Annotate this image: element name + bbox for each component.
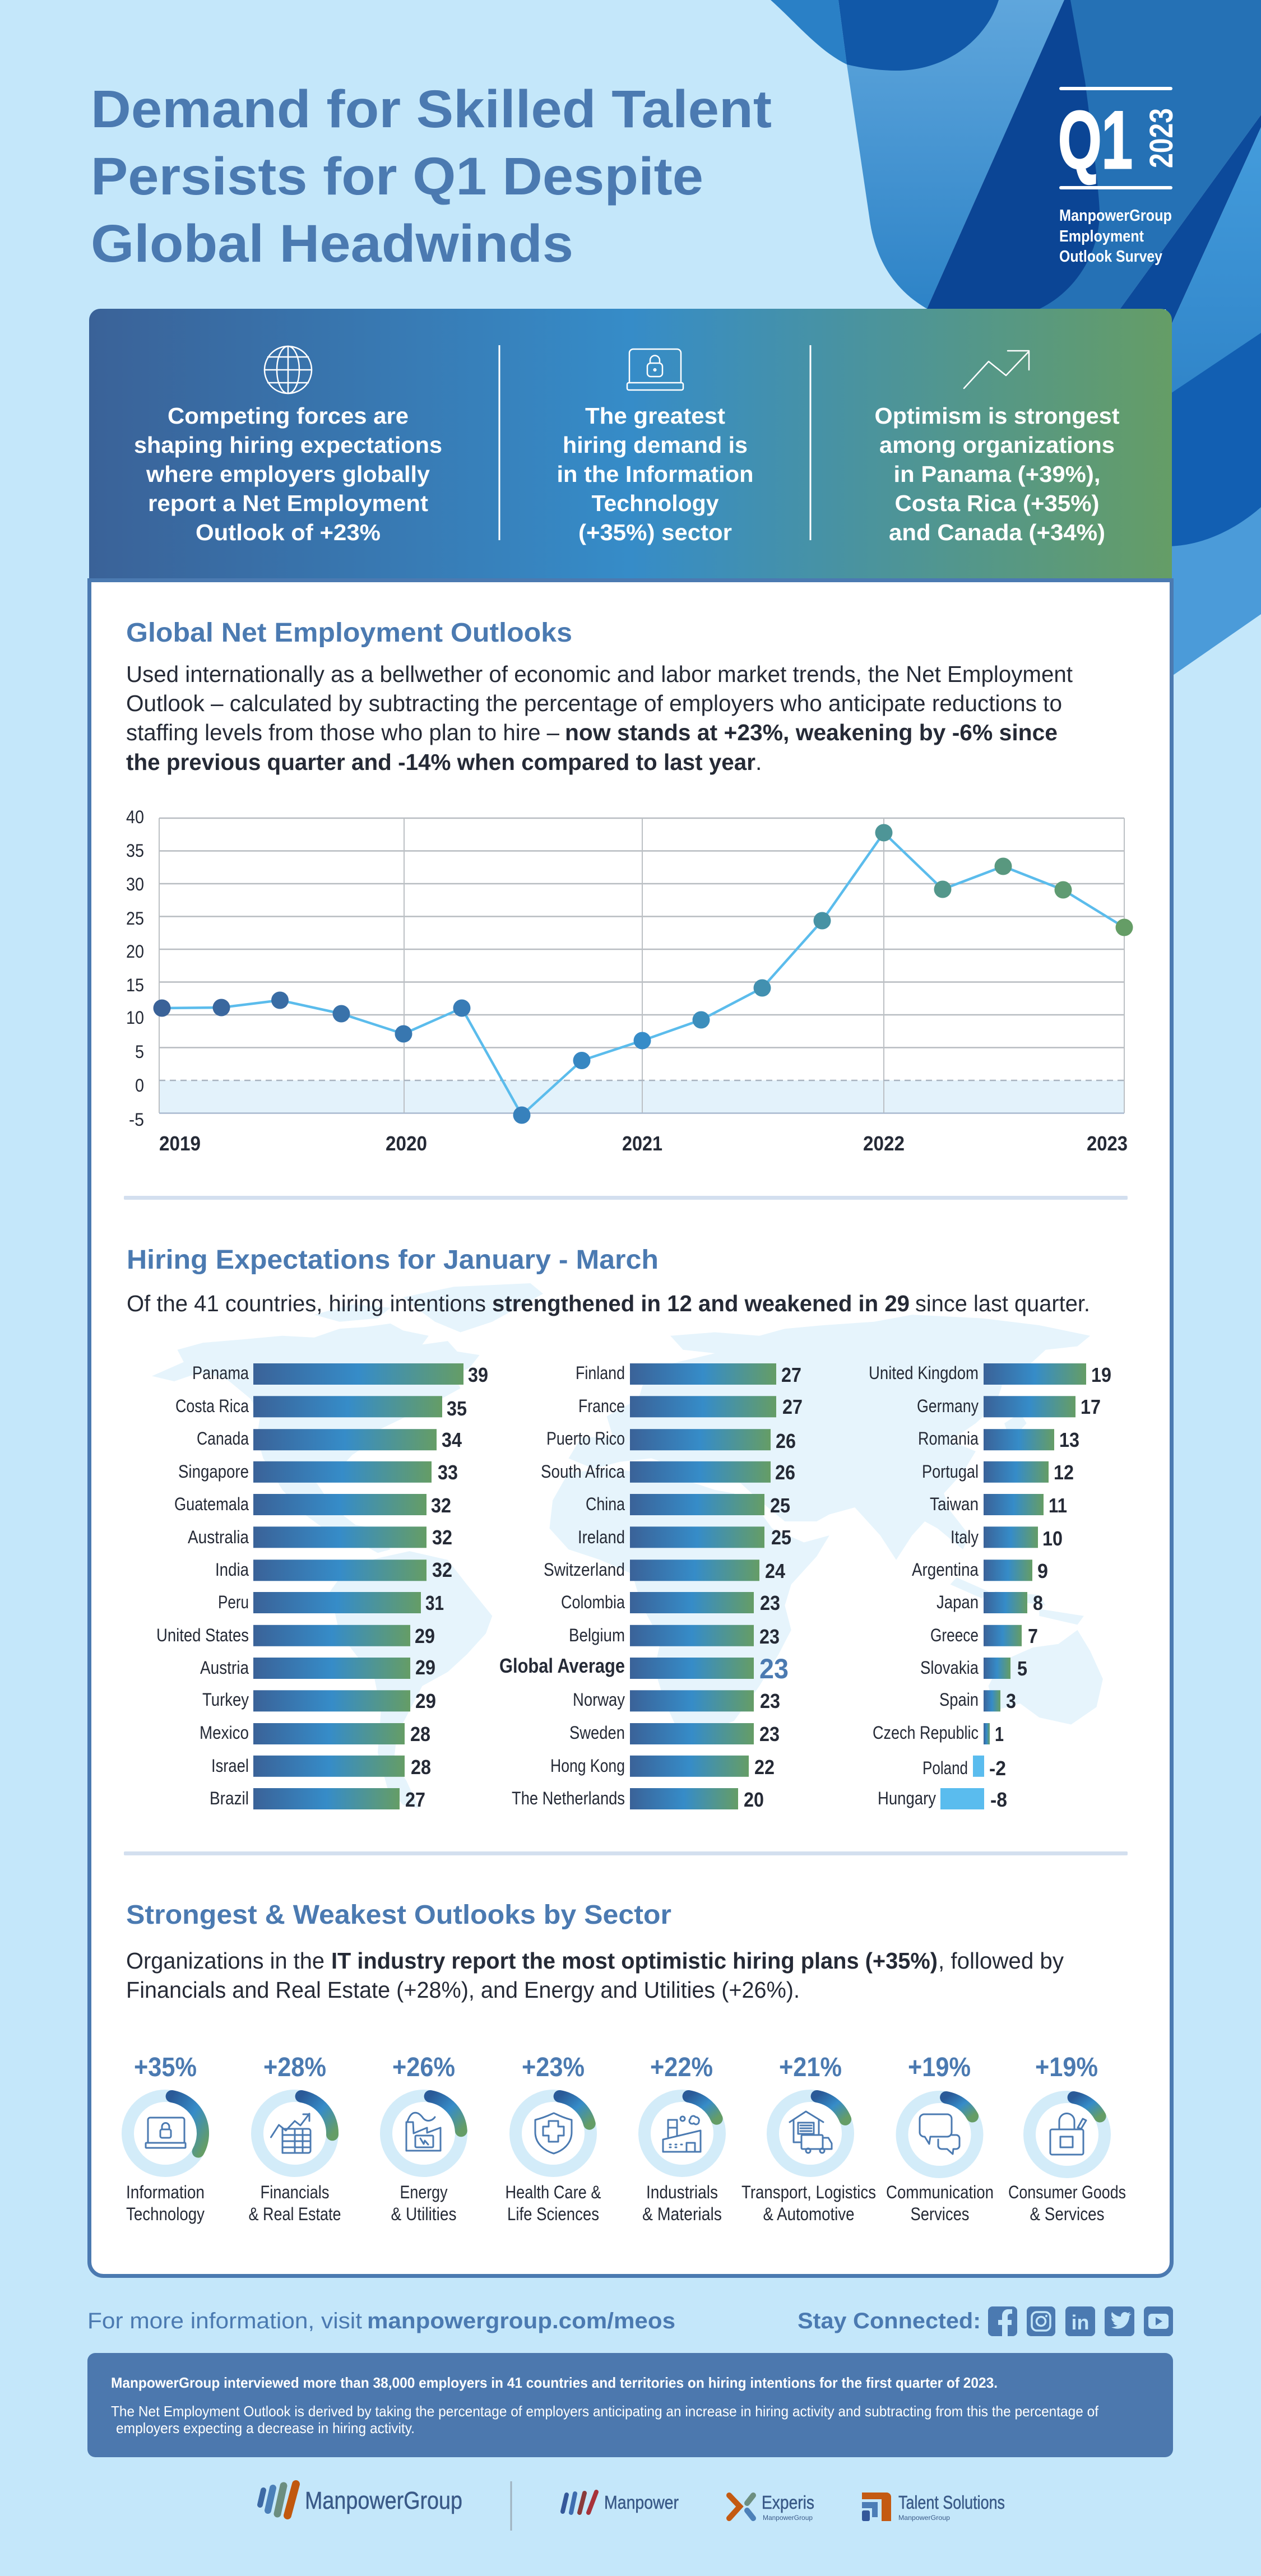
row: Australia	[188, 1526, 452, 1549]
row: Brazil	[210, 1788, 425, 1811]
row: Taiwan	[930, 1494, 1067, 1517]
line chart: global net employment outlook	[126, 807, 1133, 1155]
data points	[154, 824, 1133, 1124]
logo: Manpower: Manpower	[604, 2492, 679, 2513]
icon: laptop	[146, 2118, 186, 2148]
icon: warehouse and truck	[790, 2111, 832, 2153]
row: United Kingdom: 19	[1091, 1363, 1111, 1386]
logo: ManpowerGroup: ManpowerGroup	[305, 2487, 462, 2514]
y axis labels	[126, 807, 144, 1130]
icon: linkedin: in	[1072, 2311, 1090, 2334]
logo: Talent Solutions: ManpowerGroup	[898, 2514, 950, 2522]
sector: Consumer Goods & Services: +19%	[1035, 2053, 1098, 2082]
highlight: IT sector	[557, 403, 753, 545]
highlight: IT sector: in the Information	[557, 461, 753, 487]
row: Peru	[218, 1591, 444, 1614]
row: Austria: 29	[415, 1656, 435, 1679]
sector: Information Technology: Information	[126, 2182, 205, 2202]
highlight: IT sector: hiring demand is	[563, 432, 748, 458]
y axis labels: 25	[126, 908, 144, 929]
row: Global Average: Global Average	[499, 1654, 625, 1677]
row: China	[586, 1494, 790, 1517]
row: Costa Rica	[175, 1396, 467, 1420]
section 1 paragraph: now stands at +23%, weakening by -6% since	[565, 720, 1058, 745]
row: United Kingdom	[869, 1363, 1111, 1386]
logo: ManpowerGroup	[260, 2484, 462, 2515]
logo: Experis: ManpowerGroup	[763, 2514, 813, 2522]
row: Portugal: 12	[1054, 1461, 1074, 1484]
row: Japan	[937, 1591, 1043, 1614]
bar chart: column 2	[499, 1363, 803, 1811]
row: Slovakia: 5	[1017, 1657, 1027, 1680]
highlight: strongest countries	[874, 403, 1120, 545]
row: Germany	[917, 1395, 1101, 1418]
row: Guatemala: 32	[431, 1494, 451, 1517]
y axis labels: -5	[129, 1110, 144, 1130]
x axis labels: 2020	[386, 1132, 427, 1155]
highlight: global outlook	[134, 403, 442, 545]
x axis labels: 2022	[863, 1132, 905, 1155]
row: Switzerland: Switzerland	[544, 1559, 625, 1580]
highlight: strongest countries: Optimism is strongest	[874, 403, 1120, 429]
sector: Financials & Real Estate	[249, 2053, 341, 2224]
row: Portugal: Portugal	[922, 1461, 979, 1482]
row: Ireland	[578, 1526, 791, 1549]
row: Australia: Australia	[188, 1527, 249, 1547]
background shapes	[771, 0, 1261, 680]
sector: Energy & Utilities	[386, 2053, 461, 2224]
row: Singapore: 33	[438, 1461, 458, 1484]
row: Argentina	[912, 1559, 1048, 1582]
data line	[162, 833, 1124, 1115]
x axis labels: 2019	[159, 1132, 201, 1155]
sector: Transport, Logistics & Automotive: +21%	[779, 2053, 842, 2082]
row: Czech Republic: Czech Republic	[873, 1723, 979, 1743]
panel: key highlights	[89, 309, 1172, 579]
row: Puerto Rico: 26	[776, 1429, 796, 1452]
row: Sweden	[569, 1723, 780, 1746]
section 2 intro text: since last quarter.	[915, 1291, 1090, 1316]
row: Canada	[197, 1428, 462, 1451]
sector: Energy & Utilities: Energy	[400, 2182, 447, 2202]
footer link: manpowergroup.com/meos	[367, 2309, 675, 2333]
row: United Kingdom: United Kingdom	[869, 1363, 979, 1383]
row: The Netherlands	[512, 1788, 764, 1811]
sector: Communication Services: Services	[910, 2204, 970, 2224]
highlight: IT sector: The greatest	[585, 403, 725, 429]
footer link: For more information, visit	[87, 2309, 362, 2333]
row: Colombia: Colombia	[561, 1592, 625, 1612]
sector: Health Care & Life Sciences: Life Sciences	[507, 2204, 599, 2224]
row: China: China	[586, 1494, 625, 1514]
sector: Financials & Real Estate: & Real Estate	[249, 2204, 341, 2224]
row: Hong Kong: 22	[754, 1756, 775, 1779]
sector: Communication Services: Communication	[886, 2182, 994, 2202]
highlight: global outlook: shaping hiring expectations	[134, 432, 442, 458]
section 3 paragraph: Organizations in the	[126, 1948, 324, 1974]
row: Brazil: 27	[405, 1788, 425, 1811]
row: Global Average	[499, 1653, 789, 1684]
y axis labels: 5	[135, 1042, 144, 1062]
row: Germany: Germany	[917, 1396, 979, 1416]
row: Mexico: Mexico	[200, 1723, 249, 1743]
world map	[152, 1283, 1103, 1809]
row: Turkey: Turkey	[202, 1690, 249, 1710]
icon: instagram	[1027, 2306, 1055, 2336]
sector: Energy & Utilities: +26%	[392, 2053, 455, 2082]
section 1 paragraph: Used internationally as a bellwether of economic and labor market trends, the Net Employment	[126, 661, 1073, 687]
section 1 paragraph: Outlook – calculated by subtracting the percentage of employers who anticipate reductions to	[126, 690, 1062, 716]
methodology note box: ManpowerGroup interviewed more than 38,000 employers in 41 countries and territories on hiring intentions for the first quarter of 2023.	[111, 2374, 998, 2391]
section 3 paragraph: Financials and Real Estate (+28%), and Energy and Utilities (+26%).	[126, 1977, 800, 2003]
row: Japan: 8	[1033, 1591, 1043, 1614]
row: Guatemala	[174, 1494, 451, 1517]
row: Puerto Rico: Puerto Rico	[546, 1428, 625, 1449]
highlight: global outlook: Outlook of +23%	[196, 519, 381, 545]
highlight: IT sector: (+35%) sector	[578, 519, 732, 545]
section 1 paragraph: the previous quarter and -14% when compared to last year	[126, 749, 755, 775]
section 3 paragraph: , followed by	[938, 1948, 1064, 1974]
row: Hong Kong: Hong Kong	[550, 1756, 625, 1776]
row: Finland	[576, 1363, 801, 1386]
footer link	[87, 2309, 675, 2333]
row: The Netherlands: The Netherlands	[512, 1788, 625, 1808]
sector: Health Care & Life Sciences: +23%	[522, 2053, 585, 2082]
quarter badge: Outlook Survey	[1059, 248, 1162, 266]
row: Hungary	[878, 1788, 1007, 1811]
icon: globe	[265, 346, 312, 393]
row: Sweden: 23	[759, 1723, 780, 1746]
sector: Information Technology	[126, 2053, 205, 2224]
row: Spain: 3	[1006, 1690, 1016, 1712]
row: Argentina: 9	[1037, 1559, 1048, 1582]
row: Hong Kong	[550, 1756, 775, 1779]
row: Australia: 32	[432, 1526, 452, 1549]
icon: linkedin	[1065, 2306, 1095, 2336]
row: India: India	[215, 1559, 249, 1580]
sector: Transport, Logistics & Automotive: & Automotive	[763, 2204, 854, 2224]
row: Greece	[930, 1624, 1038, 1647]
row: Singapore: Singapore	[178, 1461, 249, 1482]
row: Colombia	[561, 1591, 780, 1614]
sector: Consumer Goods & Services	[1008, 2053, 1126, 2224]
logo: Talent Solutions: Talent Solutions	[898, 2492, 1005, 2513]
section 3 heading: Strongest & Weakest Outlooks by Sector	[126, 1900, 671, 1930]
row: Spain: Spain	[939, 1690, 979, 1710]
section 2 intro text: strengthened in 12 and weakened in 29	[492, 1291, 910, 1316]
row: Ireland: 25	[771, 1526, 791, 1549]
y axis labels: 35	[126, 841, 144, 861]
row: Peru: 31	[425, 1591, 444, 1614]
sector: Information Technology: +35%	[134, 2053, 197, 2082]
quarter badge: Employment	[1059, 228, 1144, 245]
row: Canada: 34	[442, 1428, 462, 1451]
sector: Industrials & Materials: Industrials	[646, 2182, 718, 2202]
logo: Talent Solutions	[862, 2492, 1005, 2522]
methodology note box: The Net Employment Outlook is derived by taking the percentage of employers anticipating an increase in hiring activity and subtracting from this the percentage of	[111, 2403, 1099, 2420]
row: Finland: Finland	[576, 1363, 625, 1383]
row: Hungary: Hungary	[878, 1788, 936, 1808]
row: Israel: 28	[411, 1756, 431, 1779]
row: South Africa	[541, 1461, 795, 1484]
row: Mexico	[200, 1723, 430, 1746]
highlight: strongest countries: and Canada (+34%)	[889, 519, 1105, 545]
row: Switzerland	[544, 1559, 785, 1582]
row: Panama: Panama	[192, 1363, 249, 1383]
icon: youtube	[1144, 2306, 1173, 2336]
row: Singapore	[178, 1461, 458, 1484]
row: Colombia: 23	[760, 1591, 780, 1614]
icon: laptop with lock	[627, 349, 683, 390]
sector: Information Technology: Technology	[126, 2204, 205, 2224]
panel: main card	[90, 581, 1171, 2276]
row: United States: United States	[156, 1625, 249, 1645]
row: Portugal	[922, 1461, 1074, 1484]
highlight: IT sector: Technology	[592, 490, 719, 516]
row: South Africa: 26	[775, 1461, 795, 1484]
row: China: 25	[770, 1494, 790, 1517]
y axis labels: 0	[135, 1075, 144, 1096]
x axis labels	[159, 1132, 1128, 1155]
row: Sweden: Sweden	[569, 1723, 625, 1743]
y axis labels: 10	[126, 1008, 144, 1028]
row: Turkey: 29	[415, 1690, 436, 1712]
sector: Industrials & Materials: & Materials	[642, 2204, 722, 2224]
quarter badge: 2023	[1143, 108, 1180, 168]
row: Costa Rica: Costa Rica	[175, 1396, 249, 1416]
sector: Consumer Goods & Services: & Services	[1030, 2204, 1104, 2224]
row: Canada: Canada	[197, 1428, 249, 1449]
row: Israel: Israel	[211, 1756, 249, 1776]
row: Puerto Rico	[546, 1428, 796, 1452]
row: Spain	[939, 1690, 1016, 1712]
x axis labels: 2023	[1087, 1132, 1128, 1155]
highlight: global outlook: where employers globally	[146, 461, 430, 487]
section 2 intro text	[127, 1291, 1090, 1316]
social links: Stay Connected:	[798, 2309, 981, 2333]
highlight: strongest countries: among organizations	[879, 432, 1115, 458]
sector: Transport, Logistics & Automotive: Transport, Logistics	[741, 2182, 876, 2202]
row: Global Average: 23	[759, 1653, 789, 1684]
y axis labels: 40	[126, 807, 144, 827]
row: Austria: Austria	[200, 1658, 249, 1678]
row: Italy: Italy	[951, 1527, 979, 1547]
row: Argentina: Argentina	[912, 1559, 979, 1580]
social links	[798, 2306, 1173, 2336]
methodology note box: employers expecting a decrease in hiring activity.	[116, 2420, 415, 2436]
row: Turkey	[202, 1690, 436, 1712]
section 3 paragraph: IT industry report the most optimistic hiring plans (+35%)	[331, 1948, 938, 1974]
sector: Financials & Real Estate: Financials	[260, 2182, 330, 2202]
row: France: 27	[782, 1395, 803, 1418]
sector: Industrials & Materials: +22%	[650, 2053, 713, 2082]
row: Norway	[573, 1690, 780, 1712]
section 2 heading: Hiring Expectations for January - March	[127, 1245, 659, 1275]
row: Norway: 23	[760, 1690, 780, 1712]
icon: speech bubbles	[920, 2114, 959, 2154]
icon: rising arrow	[964, 351, 1029, 388]
row: Greece: 7	[1028, 1624, 1038, 1647]
row: Costa Rica: 35	[447, 1397, 467, 1420]
row: Taiwan: Taiwan	[930, 1494, 979, 1514]
sector: Health Care & Life Sciences: Health Care &	[506, 2182, 601, 2202]
icon: factory with battery	[406, 2113, 441, 2151]
row: India: 32	[432, 1558, 452, 1581]
row: Panama: 39	[468, 1363, 488, 1386]
row: India	[215, 1558, 452, 1581]
sector: Transport, Logistics & Automotive	[741, 2053, 876, 2224]
highlight: global outlook: report a Net Employment	[148, 490, 428, 516]
bar chart: column 1	[156, 1363, 488, 1811]
section 1 paragraph	[126, 661, 1073, 775]
section 1 paragraph: .	[755, 749, 762, 775]
icon: industrial plant	[663, 2116, 701, 2152]
row: Hungary: -8	[990, 1788, 1007, 1811]
row: The Netherlands: 20	[744, 1788, 764, 1811]
title: Global Headwinds	[91, 214, 573, 273]
row: United States	[156, 1624, 435, 1647]
sector: Communication Services: +19%	[908, 2053, 971, 2082]
row: Panama	[192, 1363, 488, 1386]
row: France: France	[578, 1396, 625, 1416]
section 3 paragraph	[126, 1948, 1064, 2003]
row: United States: 29	[415, 1624, 435, 1647]
row: Poland: -2	[989, 1757, 1006, 1780]
icon: shield with cross	[535, 2113, 572, 2153]
row: Finland: 27	[781, 1363, 801, 1386]
logo: Experis: Experis	[762, 2492, 814, 2513]
icon: shopping bag	[1050, 2114, 1086, 2155]
icon: twitter	[1105, 2306, 1134, 2336]
highlight: global outlook: Competing forces are	[168, 403, 409, 429]
sector: Communication Services	[886, 2053, 994, 2224]
row: Slovakia: Slovakia	[920, 1658, 979, 1678]
highlight: strongest countries: in Panama (+39%),	[893, 461, 1101, 487]
sector: Industrials & Materials	[642, 2053, 722, 2224]
row: Brazil: Brazil	[210, 1788, 249, 1808]
bar chart: column 3	[869, 1363, 1111, 1811]
row: Germany: 17	[1081, 1395, 1101, 1418]
row: Poland: Poland	[922, 1758, 968, 1778]
row: Italy: 10	[1042, 1527, 1063, 1550]
row: Israel	[211, 1756, 431, 1779]
row: Belgium	[569, 1625, 780, 1648]
highlight: strongest countries: Costa Rica (+35%)	[894, 490, 1100, 516]
quarter badge: Q1	[1058, 94, 1133, 185]
row: Austria	[200, 1656, 435, 1679]
row: Greece: Greece	[930, 1625, 979, 1645]
row: Romania: Romania	[918, 1428, 979, 1449]
row: Romania	[918, 1428, 1079, 1451]
row: Belgium: 23	[759, 1625, 780, 1648]
row: Czech Republic: 1	[995, 1723, 1004, 1746]
row: Belgium: Belgium	[569, 1625, 625, 1645]
quarter badge	[1058, 87, 1180, 266]
y axis labels: 30	[126, 874, 144, 894]
quarter badge: ManpowerGroup	[1059, 207, 1172, 225]
title	[91, 80, 772, 273]
row: Romania: 13	[1059, 1428, 1079, 1451]
sector: Health Care & Life Sciences	[506, 2053, 601, 2224]
sector: Consumer Goods & Services: Consumer Goods	[1008, 2182, 1126, 2202]
row: Mexico: 28	[410, 1723, 430, 1746]
icon: facebook	[988, 2306, 1017, 2336]
row: Japan: Japan	[937, 1592, 979, 1612]
title: Demand for Skilled Talent	[91, 80, 772, 139]
y axis labels: 20	[126, 941, 144, 962]
logo: Experis	[729, 2492, 814, 2522]
row: Norway: Norway	[573, 1690, 625, 1710]
row: France	[578, 1395, 803, 1418]
x axis labels: 2021	[622, 1132, 662, 1155]
row: Poland	[922, 1756, 1006, 1780]
row: Ireland: Ireland	[578, 1527, 625, 1547]
row: Italy	[951, 1526, 1063, 1550]
icon: table and arrow	[271, 2114, 310, 2153]
sector: Energy & Utilities: & Utilities	[391, 2204, 456, 2224]
row: South Africa: South Africa	[541, 1461, 625, 1482]
row: Guatemala: Guatemala	[174, 1494, 249, 1514]
section 2 intro text: Of the 41 countries, hiring intentions	[127, 1291, 486, 1316]
section 1 heading: Global Net Employment Outlooks	[126, 618, 572, 648]
y axis labels: 15	[126, 975, 144, 995]
section 1 paragraph: staffing levels from those who plan to hire –	[126, 720, 559, 745]
row: Peru: Peru	[218, 1592, 249, 1612]
row: Slovakia	[920, 1657, 1027, 1680]
row: Switzerland: 24	[765, 1559, 785, 1582]
logo: Manpower	[563, 2492, 679, 2513]
sector: Financials & Real Estate: +28%	[263, 2053, 326, 2082]
title: Persists for Q1 Despite	[91, 147, 703, 206]
row: Taiwan: 11	[1049, 1494, 1067, 1517]
methodology note box	[87, 2353, 1173, 2457]
